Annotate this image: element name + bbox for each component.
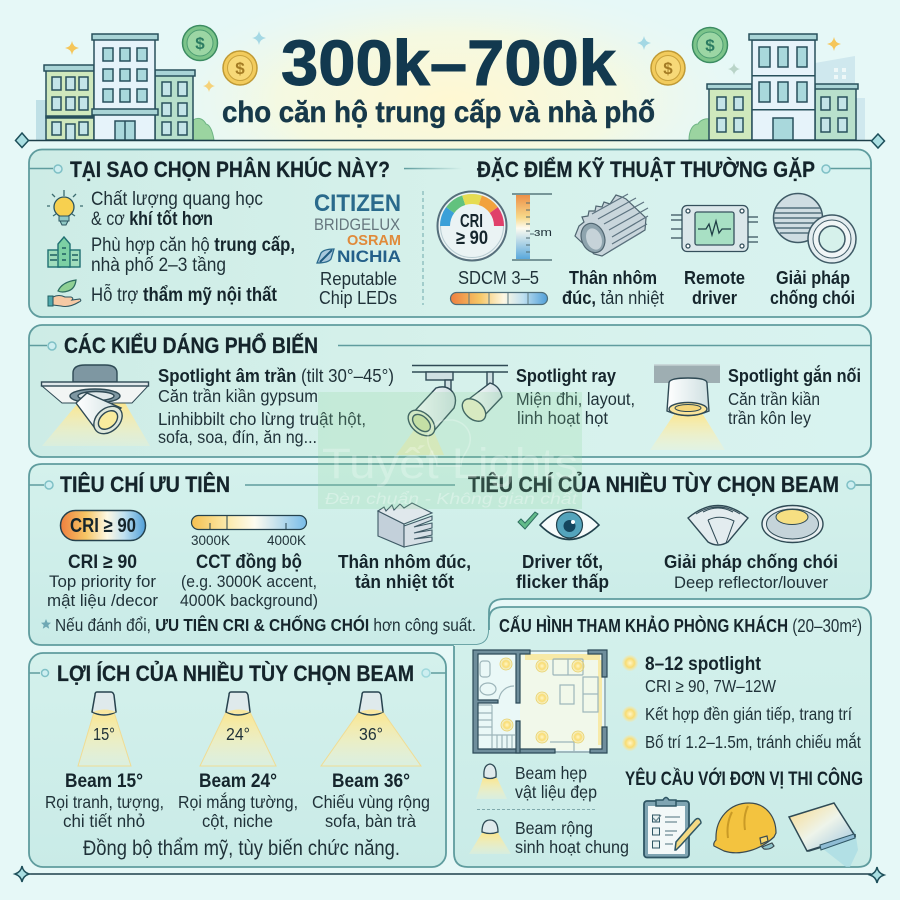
beam 36 text: Beam 36° — [332, 771, 410, 792]
text: recessed line 3: sofa, soa, đín, ăn ng... — [158, 427, 317, 447]
beam 36 text: sofa, bàn trà — [325, 811, 416, 831]
heading: beam criteria: TIÊU CHÍ CỦA NHIỀU TÙY CHỌN BEAM — [468, 472, 839, 497]
CCT text block: CCT đồng bộ — [196, 552, 302, 573]
CRI text block — [47, 552, 159, 610]
text: driver: driver — [692, 287, 737, 308]
icon: CRI gauge: CRI — [460, 211, 483, 231]
heading: why: TẠI SAO CHỌN PHÂN KHÚC NÀY? — [70, 157, 390, 182]
text: driver criteria: Driver tốt, — [522, 551, 603, 572]
beam 15 text: Beam 15° — [65, 771, 143, 792]
CCT bar — [191, 516, 306, 548]
CCT text block: 4000K background) — [180, 592, 318, 610]
spec list: Bố trí 1.2–1.5m, tránh chiếu mắt — [645, 731, 861, 752]
beam wide legend — [469, 818, 629, 857]
beam 36 diagram — [321, 692, 421, 766]
icon: light bulb — [47, 190, 83, 225]
watermark: Tuyết Lights — [322, 440, 578, 488]
chip brand logos: OSRAM — [347, 232, 401, 249]
icon: recessed spotlight — [42, 365, 150, 446]
text: anti glare: Giải pháp — [776, 267, 850, 288]
text: driver criteria — [516, 551, 609, 592]
panel: why this segment and technical features — [29, 150, 871, 317]
beam 24 text: cột, niche — [202, 811, 273, 831]
chip brand logos: BRIDGELUX — [314, 215, 400, 234]
heading: benefits: LỢI ÍCH CỦA NHIỀU TÙY CHỌN BEAM — [57, 661, 414, 686]
text: track line 2: linh hoạt họt — [517, 408, 608, 428]
icon: colour scale: ɜm — [534, 227, 552, 239]
icon: eye with check — [518, 510, 599, 540]
icon: buildings — [48, 237, 80, 267]
SDCM bar — [450, 292, 548, 304]
icon: CRI gauge — [438, 192, 506, 260]
icon: coins and sparkles right: $ — [663, 59, 673, 78]
panel: priority criteria — [29, 464, 871, 645]
text: heat sink criteria — [338, 551, 471, 592]
text: surface line 1: Căn trần kiần — [728, 389, 820, 409]
text: townhouse: nhà phố 2–3 tầng — [91, 255, 226, 276]
icon: small heat sink — [378, 503, 432, 547]
text: anti glare criteria: Giải pháp chống chói — [664, 551, 838, 572]
icon: coins and sparkles left — [65, 26, 266, 92]
beam 36 text — [312, 771, 430, 831]
chip brand logos: NICHIA — [337, 247, 401, 266]
text: remote driver: Remote — [684, 267, 745, 288]
beam narrow legend: vật liệu đẹp — [515, 782, 597, 802]
icon: clipboard — [644, 798, 701, 858]
text: anti glare criteria: Deep reflector/louver — [674, 574, 828, 592]
floor plan — [473, 650, 607, 753]
beam 24 diagram — [200, 692, 276, 766]
spec list: Kết hợp đền gián tiếp, trang trí — [645, 704, 852, 724]
text: heat sink criteria: tản nhiệt tốt — [355, 571, 454, 592]
text: recessed spotlight title: Spotlight âm trần (tilt 30°–45°) — [158, 365, 394, 386]
panel: living room config — [454, 607, 871, 867]
beam 24 text — [178, 771, 298, 831]
text: optical quality: Chất lượng quang học — [91, 189, 263, 210]
text: surface line 2: trần kôn ley — [728, 408, 811, 428]
beam 24 diagram: 24° — [226, 724, 250, 744]
beam 36 text: Chiếu vùng rộng — [312, 792, 430, 812]
heading: specs: ĐẶC ĐIỂM KỸ THUẬT THƯỜNG GẶP — [477, 157, 815, 182]
CCT text block — [180, 552, 318, 610]
icon: coins and sparkles left: $ — [235, 59, 245, 78]
text: anti glare line 2: chống chói — [770, 287, 855, 308]
CCT bar: 3000K — [191, 533, 230, 548]
spec list — [622, 653, 861, 752]
icon: panel light — [789, 803, 858, 867]
text: recessed line 2: Linhibbilt cho lừng truật hột, — [158, 409, 366, 429]
beam 15 text — [45, 771, 164, 831]
chip brand logos: Reputable — [320, 269, 397, 289]
chip brand logos — [314, 190, 401, 308]
panel: benefits of beam options — [29, 653, 446, 867]
icon: remote driver — [671, 206, 758, 252]
icon: coins and sparkles left: $ — [195, 34, 205, 53]
CCT bar: 4000K — [267, 533, 306, 548]
text: track spotlight title: Spotlight ray — [516, 365, 617, 386]
beam 15 diagram — [78, 692, 131, 766]
text: anti glare criteria — [664, 551, 838, 592]
heading: priority: TIÊU CHÍ ƯU TIÊN — [60, 472, 230, 497]
panel: common styles — [29, 325, 871, 457]
text: suitable: Phù hợp căn hộ trung cấp, — [91, 235, 295, 256]
watermark — [318, 392, 582, 509]
text: surface spotlight title: Spotlight gắn nối — [728, 365, 861, 386]
text: heat sink: Thân nhôm — [569, 267, 657, 288]
beam 24 text: Beam 24° — [199, 771, 277, 792]
CCT text block: (e.g. 3000K accent, — [181, 573, 317, 591]
text: benefits summary: Đồng bộ thẩm mỹ, tùy biến chức năng. — [83, 837, 400, 860]
icon: track spotlight — [396, 366, 508, 455]
bottom divider line with diamonds — [15, 866, 884, 883]
text: heat sink criteria: Thân nhôm đúc, — [338, 551, 471, 572]
beam 36 diagram: 36° — [359, 724, 383, 744]
left building illustration — [36, 34, 214, 140]
beam 15 diagram: 15° — [93, 724, 115, 744]
text: aesthetics: Hỗ trợ thẩm mỹ nội thất — [91, 284, 278, 306]
spec list: CRI ≥ 90, 7W–12W — [645, 676, 776, 696]
beam 15 text: chi tiết nhỏ — [63, 811, 145, 831]
heading: config: CẤU HÌNH THAM KHẢO PHÒNG KHÁCH (20–30m²) — [499, 615, 862, 636]
icon: hard hat — [714, 803, 776, 853]
CRI pill — [60, 510, 146, 540]
title: 300k–700k — [281, 27, 616, 99]
text: driver criteria: flicker thấp — [516, 571, 609, 592]
CRI text block: mật liệu /decor — [47, 592, 159, 610]
icon: louver and ring — [774, 194, 856, 263]
chip brand logos: CITIZEN — [314, 190, 401, 217]
right building illustration — [689, 34, 865, 140]
text: track line 1: Miện đhi, layout, — [516, 389, 635, 409]
beam narrow legend: Beam hẹp — [515, 763, 587, 783]
icon: coins and sparkles right: $ — [705, 36, 715, 55]
text: mechanics: & cơ khí tốt hơn — [91, 209, 213, 230]
beam wide legend: Beam rộng — [515, 818, 593, 838]
heading: styles: CÁC KIỂU DÁNG PHỔ BIẾN — [64, 333, 318, 358]
icon: surface spotlight — [650, 365, 725, 450]
beam narrow legend — [476, 763, 597, 802]
icon: reflector and louver — [688, 506, 823, 545]
icon: CRI gauge: ≥ 90 — [456, 228, 488, 249]
CRI text block: CRI ≥ 90 — [68, 552, 137, 573]
text: SDCM: SDCM 3–5 — [458, 268, 539, 288]
beam 15 text: Rọi tranh, tượng, — [45, 792, 164, 812]
text: recessed line 1: Căn trần kiần gypsum — [158, 386, 318, 406]
subtitle: cho căn hộ trung cấp và nhà phố — [222, 96, 655, 129]
watermark: Đèn chuẩn - Không gian chất — [325, 490, 578, 508]
note: Nếu đánh đổi, ƯU TIÊN CRI & CHỐNG CHÓI hơn công suất. — [55, 614, 476, 635]
CRI text block: Top priority for — [49, 573, 157, 591]
beam 24 text: Rọi mắng tường, — [178, 791, 298, 812]
chip brand logos: Chip LEDs — [319, 288, 397, 308]
beam wide legend: sinh hoạt chung — [515, 837, 629, 857]
text: die cast: đúc, tản nhiệt — [562, 288, 664, 308]
top divider line with diamonds — [16, 133, 884, 148]
icon: aluminium heat sink — [575, 194, 648, 256]
icon: colour scale — [512, 194, 552, 260]
icon: coins and sparkles right — [637, 28, 841, 85]
CRI pill: CRI ≥ 90 — [70, 515, 136, 537]
icon: hand and leaf — [48, 280, 81, 306]
spec list: 8–12 spotlight — [645, 653, 761, 675]
